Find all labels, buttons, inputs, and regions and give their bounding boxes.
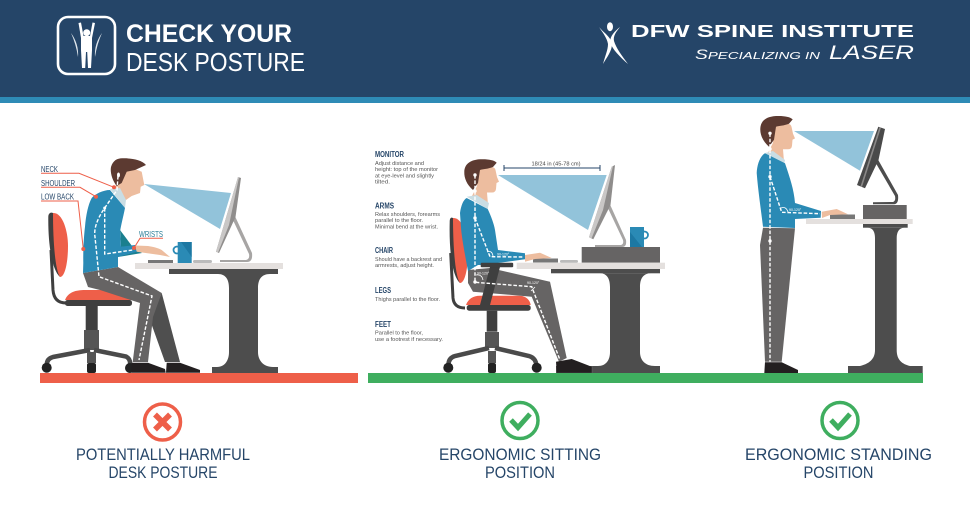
keyboard bbox=[830, 214, 855, 219]
keyboard and mouse bbox=[533, 258, 578, 263]
caption bbox=[745, 445, 932, 482]
posture guide lines: 90-120° bbox=[497, 252, 510, 256]
ergonomic guidance notes: Adjust distance and bbox=[375, 161, 424, 167]
ergonomic guidance notes: height: top of the monitor bbox=[375, 167, 438, 173]
logo figure bbox=[599, 22, 628, 64]
ergonomic guidance notes: Should have a backrest and bbox=[375, 257, 442, 263]
panel: ergonomic standing bbox=[757, 116, 923, 373]
head bbox=[464, 159, 499, 205]
header banner bbox=[0, 0, 970, 103]
title: CHECK YOUR bbox=[126, 20, 292, 48]
person: standing upright bbox=[757, 116, 848, 373]
sight cone bbox=[794, 131, 874, 171]
title: DESK POSTURE bbox=[126, 47, 305, 77]
armrest bbox=[480, 263, 513, 305]
sight cone bbox=[498, 175, 607, 230]
monitor bbox=[589, 165, 626, 247]
mug bbox=[630, 227, 648, 247]
icon: person stretching bbox=[58, 17, 115, 74]
desk bbox=[135, 263, 283, 373]
posture guide lines: 90-120° bbox=[789, 208, 802, 212]
ergonomic guidance notes: FEET bbox=[375, 320, 391, 329]
caption: ERGONOMIC STANDING bbox=[745, 445, 932, 464]
posture guide lines bbox=[95, 172, 152, 360]
caption bbox=[76, 445, 250, 482]
caption: ERGONOMIC SITTING bbox=[439, 445, 601, 464]
desk and riser bbox=[517, 247, 665, 373]
distance measure bbox=[504, 162, 600, 171]
caption: POSITION bbox=[804, 463, 874, 482]
monitor bbox=[857, 127, 898, 204]
ergonomic guidance notes: parallel to the floor. bbox=[375, 218, 423, 224]
ergonomic guidance notes: tilted. bbox=[375, 180, 391, 186]
verdict: sitting good bbox=[439, 402, 601, 482]
floor bar red bbox=[40, 373, 358, 383]
logo text: S PECIALIZING IN bbox=[695, 47, 821, 62]
callouts: problem areas bbox=[41, 165, 163, 251]
ergonomic guidance notes: Parallel to the floor, bbox=[375, 331, 423, 337]
caption: POTENTIALLY HARMFUL bbox=[76, 445, 250, 464]
posture guide lines bbox=[768, 132, 820, 362]
caption bbox=[439, 445, 601, 482]
logo text bbox=[631, 21, 914, 64]
head bbox=[760, 116, 795, 162]
chair bbox=[443, 218, 542, 373]
ergonomic guidance notes: use a footrest if necessary. bbox=[375, 337, 443, 343]
panel: ergonomic sitting bbox=[443, 159, 665, 373]
person: slouching bbox=[83, 158, 200, 373]
distance measure: 18/24 in (45-78 cm) bbox=[532, 162, 581, 168]
logo text: DFW SPINE INSTITUTE bbox=[631, 21, 914, 41]
keyboard and mouse bbox=[148, 260, 212, 263]
panel: harmful desk posture bbox=[40, 158, 358, 383]
caption: DESK POSTURE bbox=[108, 463, 218, 482]
standing desk bbox=[806, 205, 923, 373]
callouts: problem areas: LOW BACK bbox=[41, 192, 75, 202]
logo: DFW Spine Institute bbox=[599, 21, 914, 64]
icon: check in circle bbox=[822, 402, 858, 438]
ergonomic guidance notes: MONITOR bbox=[375, 150, 404, 159]
icon: cross in circle bbox=[144, 404, 180, 440]
ergonomic guidance notes: CHAIR bbox=[375, 246, 393, 255]
monitor bbox=[216, 177, 252, 262]
callouts: problem areas: NECK bbox=[41, 165, 59, 174]
ergonomic guidance notes: Thighs parallel to the floor. bbox=[375, 297, 440, 303]
ergonomic guidance notes: at eye-level and slightly bbox=[375, 173, 434, 179]
ergonomic guidance notes: Minimal bend at the wrist. bbox=[375, 224, 438, 230]
mug bbox=[174, 242, 192, 263]
person: sitting upright bbox=[460, 159, 592, 373]
caption: POSITION bbox=[485, 463, 555, 482]
posture guide lines: 90-120° bbox=[477, 272, 490, 276]
verdict: harmful bbox=[76, 404, 250, 482]
logo text: LASER bbox=[829, 42, 914, 64]
icon: check in circle bbox=[502, 402, 538, 438]
callouts: problem areas: SHOULDER bbox=[41, 179, 75, 188]
title bbox=[126, 20, 305, 77]
posture guide lines: 90-120° bbox=[527, 281, 540, 285]
posture guide lines bbox=[473, 173, 560, 360]
ergonomic guidance notes bbox=[375, 150, 443, 343]
ergonomic guidance notes: LEGS bbox=[375, 286, 391, 295]
sight cone bbox=[144, 184, 231, 229]
floor bar green bbox=[368, 373, 923, 383]
ergonomic guidance notes: Relax shoulders, forearms bbox=[375, 212, 440, 218]
verdict: standing good bbox=[745, 402, 932, 482]
callouts: problem areas: WRISTS bbox=[139, 230, 163, 239]
ergonomic guidance notes: ARMS bbox=[375, 202, 395, 210]
ergonomic guidance notes: armrests, adjust height. bbox=[375, 263, 434, 269]
chair bbox=[42, 213, 135, 373]
